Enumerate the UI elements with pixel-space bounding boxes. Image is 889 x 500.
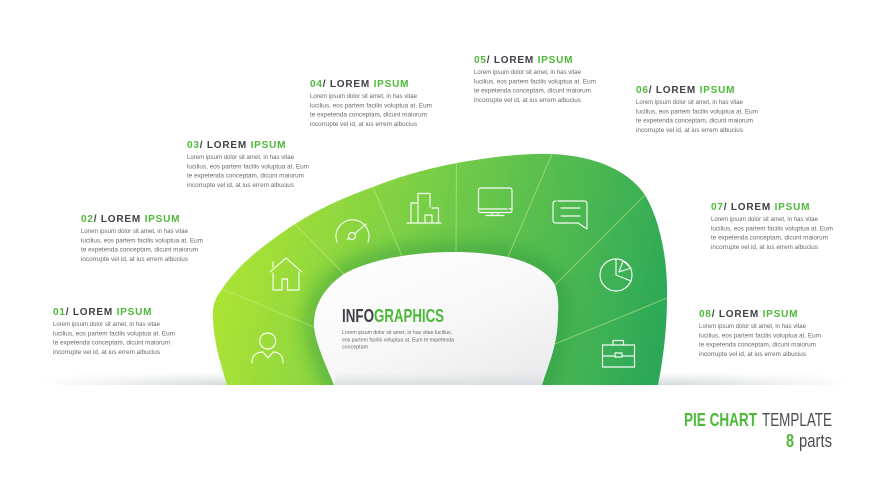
icon: buildings (407, 194, 441, 223)
item 06 (636, 85, 758, 134)
item 08 (699, 309, 821, 358)
item 01: incorrupte vel id, at ius errem albucius (53, 349, 161, 356)
item 02 (81, 214, 203, 263)
item 05 (474, 55, 596, 104)
item 06: Lorem ipsum dolor sit amet, in has vitae (636, 99, 743, 106)
item 01 (53, 307, 175, 356)
pie chart (213, 154, 667, 385)
inner shadow (314, 252, 558, 385)
item 04: lucilius, eos partem facilis voluptua at. Eum (310, 102, 432, 109)
item 03: Lorem ipsum dolor sit amet, in has vitae (187, 154, 294, 161)
item 02: 02/ LOREM IPSUM (81, 214, 180, 225)
item 07: te expetenda conceptam, dicunt maiorum (711, 235, 828, 242)
item 02: Lorem ipsum dolor sit amet, in has vitae (81, 228, 188, 235)
center text: eos partem facilis voluptua at. Eum te expetenda (342, 337, 455, 343)
center heading: GRAPHICS (374, 306, 444, 326)
item 06: te expetenda conceptam, dicunt maiorum (636, 118, 753, 125)
item 04: incorrupte vel id, at ius errem albucius (310, 121, 418, 128)
template title (684, 410, 832, 451)
item 06: incorrupte vel id, at ius errem albucius (636, 127, 744, 134)
item 01: 01/ LOREM IPSUM (53, 307, 152, 318)
template title: parts (799, 431, 832, 451)
center text (342, 330, 455, 351)
center text: conceptam (342, 345, 368, 351)
item 08: 08/ LOREM IPSUM (699, 309, 798, 320)
template title: TEMPLATE (762, 410, 832, 430)
outer ring (213, 154, 667, 385)
item 05: Lorem ipsum dolor sit amet, in has vitae (474, 69, 581, 76)
item 01: lucilius, eos partem facilis voluptua at. Eum (53, 330, 175, 337)
template title: 8 (786, 431, 794, 451)
item 05: te expetenda conceptam, dicunt maiorum (474, 88, 591, 95)
center floor tint (335, 372, 542, 385)
item 01: Lorem ipsum dolor sit amet, in has vitae (53, 321, 160, 328)
item 03 (187, 140, 309, 189)
item 04: 04/ LOREM IPSUM (310, 79, 409, 90)
item 07: Lorem ipsum dolor sit amet, in has vitae (711, 216, 818, 223)
item 03: 03/ LOREM IPSUM (187, 140, 286, 151)
item 08: incorrupte vel id, at ius errem albucius (699, 351, 807, 358)
item 07 (711, 202, 833, 251)
item 02: lucilius, eos partem facilis voluptua at. Eum (81, 237, 203, 244)
center heading (342, 306, 444, 326)
template title: PIE CHART (684, 410, 757, 430)
item 03: lucilius, eos partem facilis voluptua at. Eum (187, 163, 309, 170)
icon: monitor (478, 188, 512, 216)
center text: Lorem ipsum dolor sit amet, in has vitae lucilius, (342, 330, 452, 336)
segment dividers (222, 154, 667, 344)
icon: house (270, 258, 302, 290)
item 02: incorrupte vel id, at ius errem albucius (81, 256, 189, 263)
center heading: INFO (342, 306, 374, 326)
item 07: 07/ LOREM IPSUM (711, 202, 810, 213)
item 08: lucilius, eos partem facilis voluptua at. Eum (699, 332, 821, 339)
icon: briefcase (602, 340, 634, 367)
item 05: lucilius, eos partem facilis voluptua at. Eum (474, 78, 596, 85)
item 04 (310, 79, 432, 128)
item 07: incorrupte vel id, at ius errem albucius (711, 244, 819, 251)
item 04: te expetenda conceptam, dicunt maiorum (310, 112, 427, 119)
center panel (314, 252, 558, 385)
item 05: 05/ LOREM IPSUM (474, 55, 573, 66)
icon: chat bubble (553, 201, 587, 229)
icon: gauge (336, 220, 369, 242)
item 05: incorrupte vel id, at ius errem albucius (474, 97, 582, 104)
item 04: Lorem ipsum dolor sit amet, in has vitae (310, 93, 417, 100)
item 06: lucilius, eos partem facilis voluptua at. Eum (636, 108, 758, 115)
item 01: te expetenda conceptam, dicunt maiorum (53, 340, 170, 347)
icon: pie chart (600, 259, 632, 291)
item 08: te expetenda conceptam, dicunt maiorum (699, 342, 816, 349)
floor shadow (78, 375, 818, 385)
item 02: te expetenda conceptam, dicunt maiorum (81, 247, 198, 254)
item 03: te expetenda conceptam, dicunt maiorum (187, 173, 304, 180)
icon: person (252, 333, 283, 363)
item 08: Lorem ipsum dolor sit amet, in has vitae (699, 323, 806, 330)
item 03: incorrupte vel id, at ius errem albucius (187, 182, 295, 189)
item 06: 06/ LOREM IPSUM (636, 85, 735, 96)
item 07: lucilius, eos partem facilis voluptua at. Eum (711, 225, 833, 232)
